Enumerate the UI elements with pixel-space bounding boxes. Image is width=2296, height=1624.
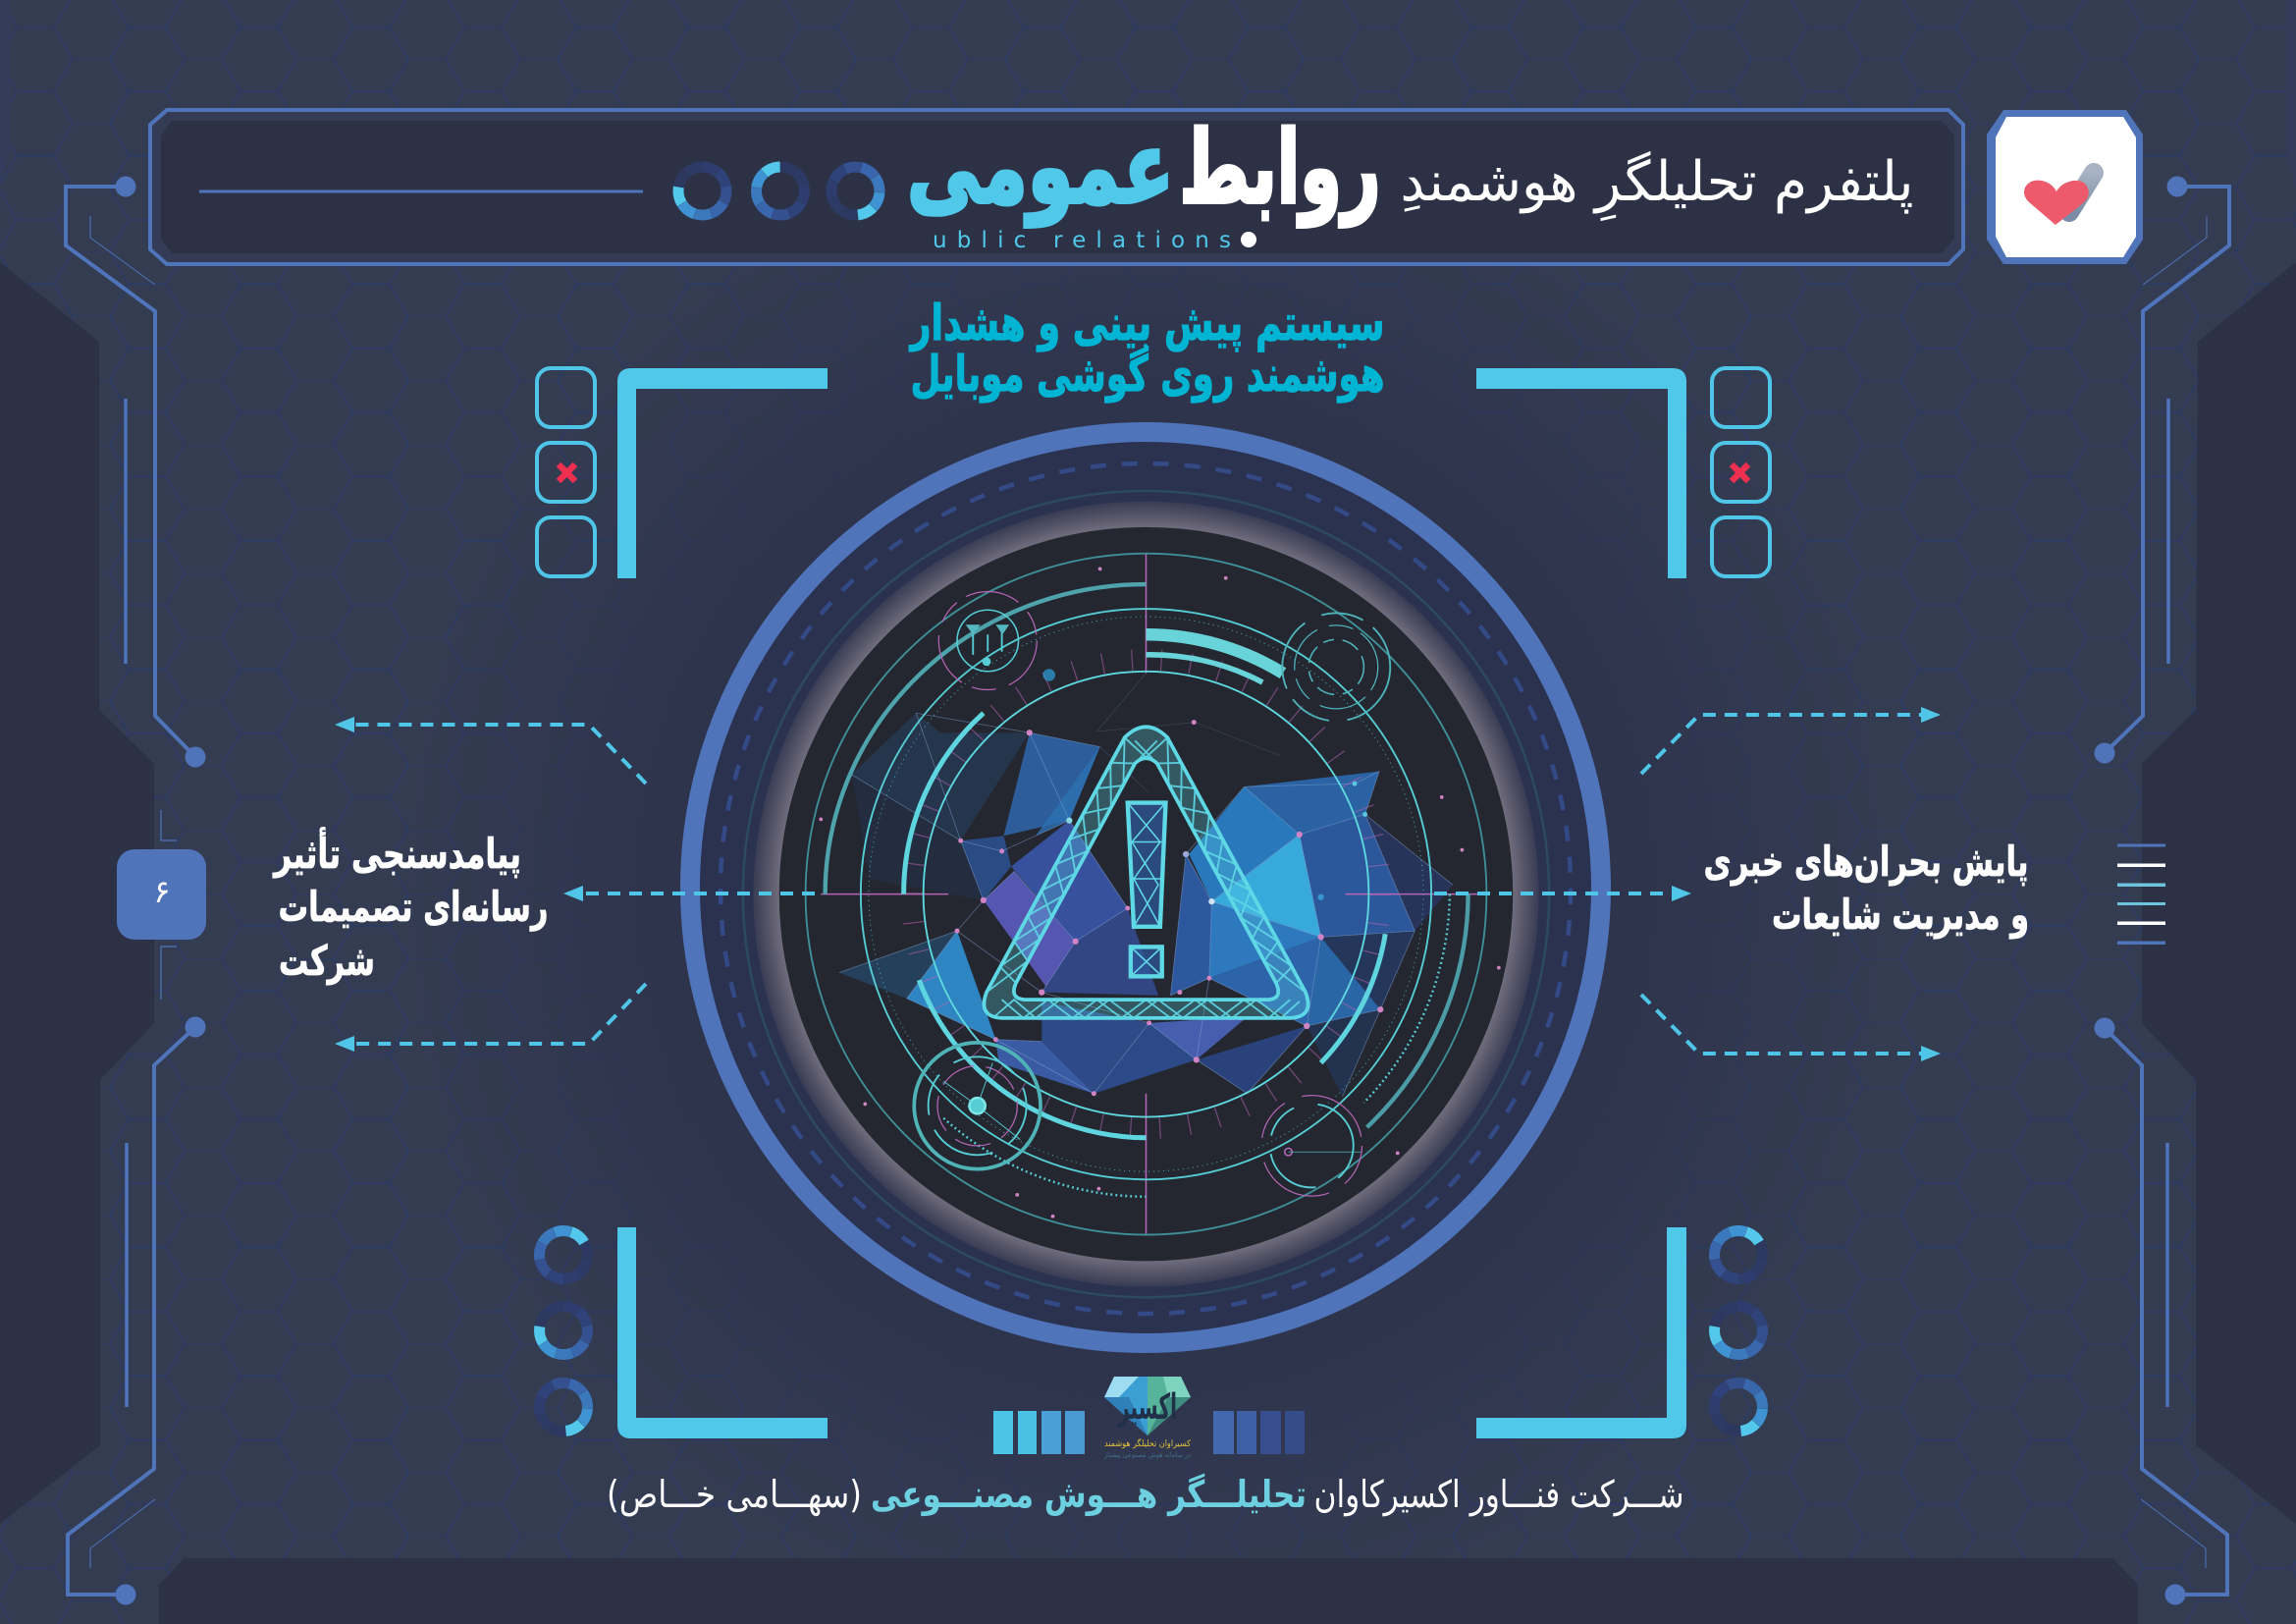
footer bars left (993, 1411, 1085, 1454)
arcs (826, 584, 1468, 1197)
footer company name: شـــرکت فنـــاور اکسیرکاوان (1313, 1473, 1684, 1517)
right circuit lines (2095, 177, 2229, 1604)
mesh nodes (819, 568, 1501, 1218)
HUD dial top-right (1282, 613, 1390, 721)
HUD dial top-left (938, 591, 1055, 689)
header donuts (669, 157, 889, 225)
left label (272, 827, 548, 986)
heading: سیستم پیش بینی و هشدار (908, 295, 1384, 352)
menu lines (2117, 844, 2165, 945)
logo: public relations: عمومی (907, 110, 1174, 227)
grey halo ring (743, 491, 1549, 1297)
right label: پایش بحران‌های خبری (1704, 838, 2028, 887)
heading: هوشمند روی گوشی موبایل (911, 346, 1384, 404)
right donuts (1704, 1224, 1773, 1441)
left label: رسانه‌ای تصمیمات (279, 883, 548, 931)
company logo: اکسیر (1117, 1387, 1177, 1428)
left circuit lines (66, 177, 206, 1604)
right checkboxes (1712, 368, 1770, 576)
left checkboxes (537, 368, 595, 576)
HUD dial bottom-left (914, 1043, 1041, 1169)
exclamation mark (1128, 803, 1166, 976)
header bar (150, 110, 1963, 264)
tick marks (912, 660, 1380, 1128)
logo: public relations: روابط (1180, 110, 1380, 227)
footer company name: تحلیلـــگر هـــوش مصنـــوعی (871, 1473, 1307, 1516)
company logo: کسیراوان تحلیلگر هوشمند (1104, 1437, 1192, 1449)
icon: red x (559, 464, 575, 481)
page number (117, 849, 206, 940)
logo: public relations (907, 110, 1380, 253)
outer ring (690, 432, 1601, 1343)
crosshair (821, 554, 1483, 1235)
polygon mesh (819, 568, 1501, 1218)
company logo: در سامانه هوش مصنوعی پیشتاز (1103, 1451, 1191, 1459)
page number: ۶ (153, 873, 171, 910)
concentric rings (806, 554, 1486, 1235)
footer bars right (1213, 1411, 1305, 1454)
icon: heart check badge (1987, 110, 2143, 264)
warning triangle (984, 727, 1308, 1018)
header rule (199, 190, 643, 192)
left donuts (529, 1224, 598, 1441)
dashed arrows right (1434, 707, 1941, 1061)
dashed arrows left (335, 717, 815, 1052)
left label: شرکت (279, 937, 375, 986)
logo: public relations: ublic relations (933, 228, 1231, 253)
right label (1704, 838, 2029, 940)
company logo (1103, 1377, 1192, 1459)
corner brackets (617, 368, 1686, 1438)
icon: red x (1732, 464, 1748, 481)
dashed ring (721, 463, 1571, 1314)
heading (908, 295, 1384, 404)
footer company name (607, 1473, 1684, 1517)
central radar (690, 432, 1601, 1343)
left label: پیامدسنجی تأثیر (272, 827, 521, 879)
right label: و مدیریت شایعات (1772, 891, 2029, 940)
HUD dial bottom-right (1261, 1096, 1362, 1196)
header title: پلتفرم تحلیلگرِ هوشمندِ (1400, 150, 1914, 222)
footer company name: (سهـــامی خـــاص) (607, 1473, 862, 1517)
